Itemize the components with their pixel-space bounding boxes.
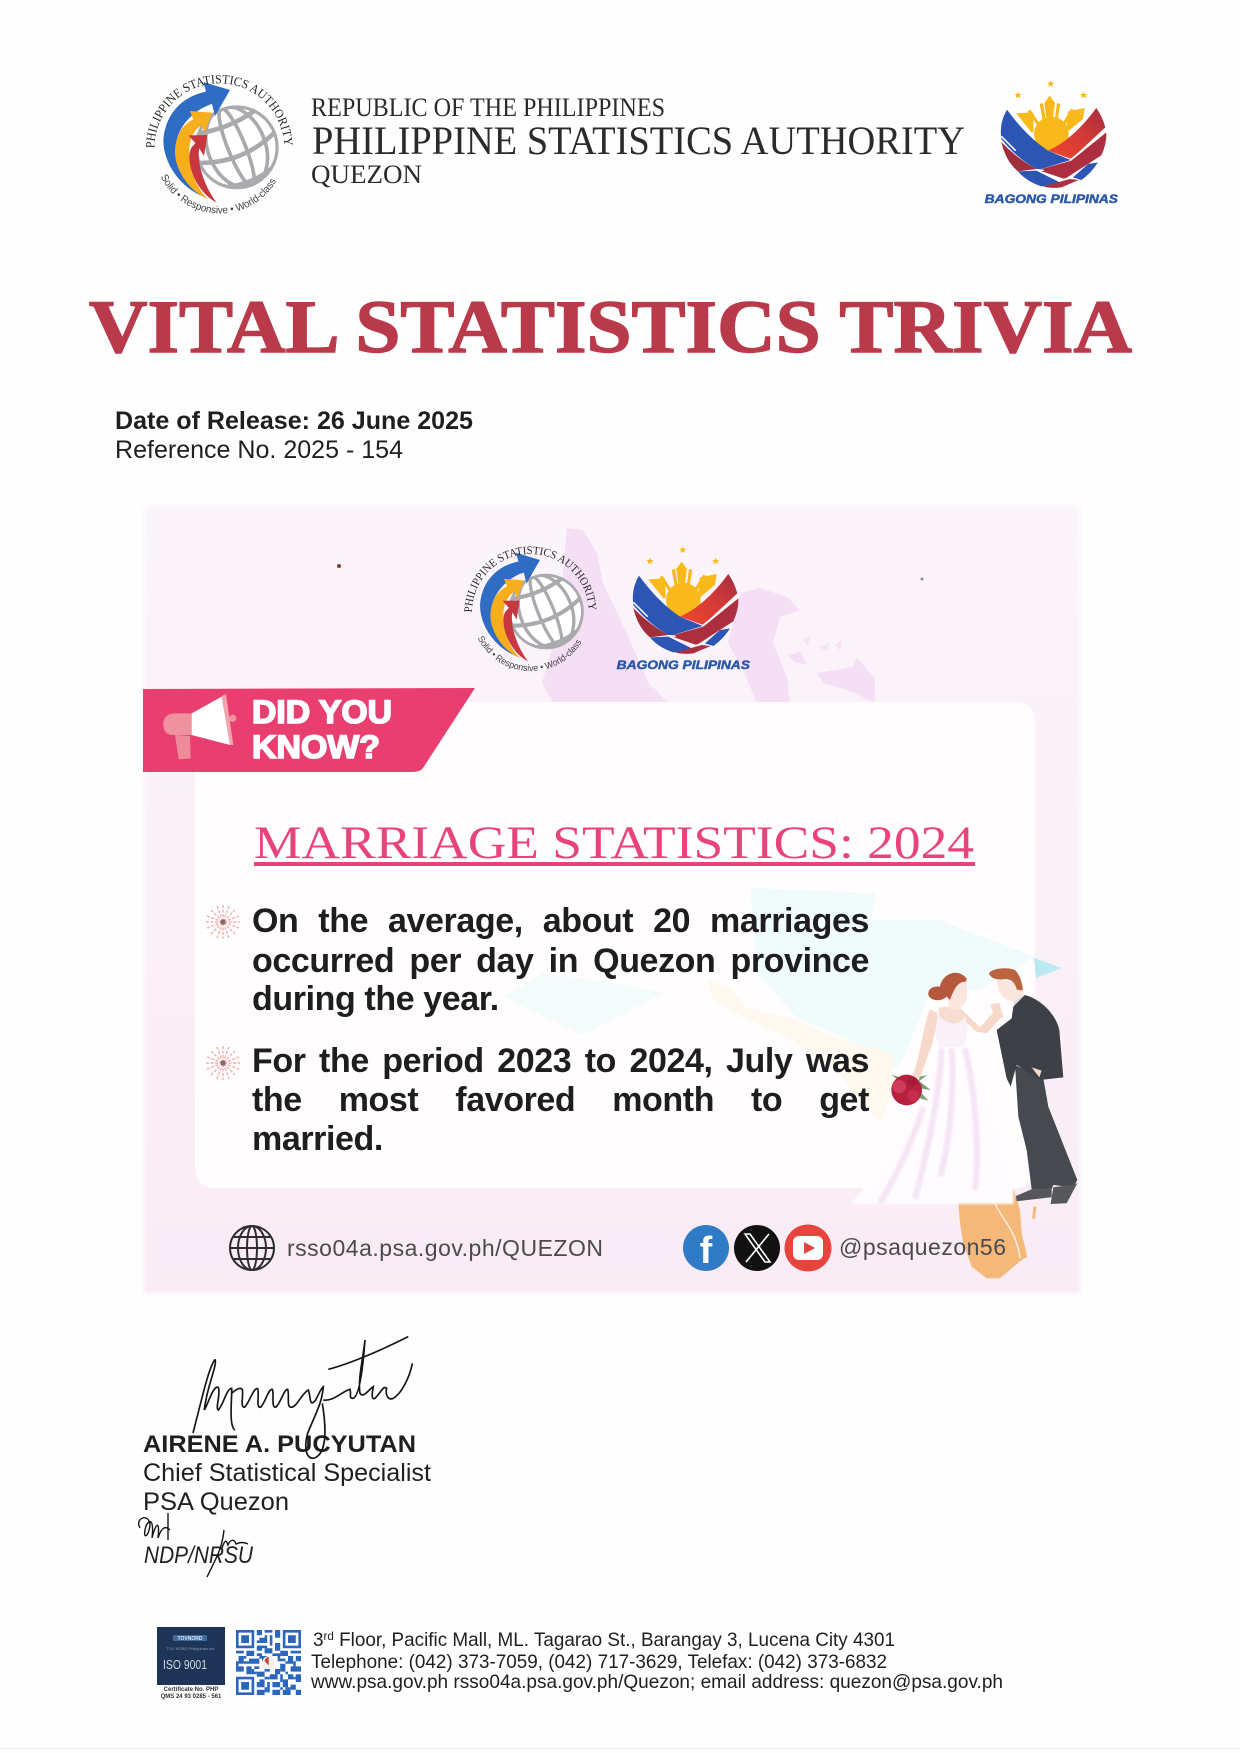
text: website: rsso04a.psa.gov.ph/QUEZON	[287, 1235, 603, 1261]
icon: sparkle bullet 2	[206, 1046, 240, 1080]
text: agency header: REPUBLIC OF THE PHILIPPINES	[311, 93, 665, 122]
map: cyan point	[1034, 958, 1062, 978]
icon: Bagong Pilipinas logo small	[617, 546, 751, 672]
text: release details	[115, 407, 473, 464]
icon: Bagong Pilipinas logo small: BAGONG PILIPINAS	[617, 658, 751, 672]
icon: PSA seal logo small: PHILIPPINE STATISTICS AUTHORITY	[464, 546, 596, 612]
title: VITAL STATISTICS TRIVIA	[89, 286, 1132, 369]
text: contact footer: Floor, Pacific Mall, ML. Tagarao St., Barangay 3, Lucena City 4301	[334, 1629, 895, 1651]
text: signatory: AIRENE A. PUCYUTAN	[143, 1431, 416, 1458]
icon: ISO certification badge: TOVNORD	[178, 1636, 203, 1642]
text: contact footer: Telephone: (042) 373-7059, (042) 717-3629, Telefax: (042) 373-6832	[311, 1651, 887, 1673]
icon: megaphone	[163, 694, 236, 759]
initials 1	[139, 1513, 170, 1540]
icon: PSA seal logo: Solid • Responsive • World-class	[162, 174, 276, 214]
bride arms and head	[912, 973, 1003, 1079]
heading: marriage statistics: MARRIAGE STATISTICS: 2024	[254, 817, 974, 869]
icon: facebook	[683, 1225, 729, 1272]
text: signatory: Chief Statistical Specialist	[143, 1459, 431, 1487]
signature scribble	[193, 1337, 412, 1458]
illustration: bride and groom	[850, 968, 1077, 1204]
map: orange island	[958, 1188, 1037, 1278]
signature block	[139, 1337, 431, 1577]
text: agency header: PHILIPPINE STATISTICS AUTHORITY	[312, 118, 965, 163]
groom	[989, 968, 1077, 1204]
map: faint cyan island	[504, 888, 1036, 1067]
text: contact footer	[310, 1629, 1003, 1693]
icon: ISO certification badge: QMS 24 93 0285 - 561	[161, 1694, 222, 1700]
text: contact footer: rd	[324, 1629, 334, 1643]
icon: ISO certification badge: Certificate No. PHP	[164, 1687, 218, 1693]
panel background	[144, 506, 1080, 1293]
text: contact footer: www.psa.gov.ph rsso04a.psa.gov.ph/Quezon; email address: quezon@psa.gov.ph	[310, 1671, 1003, 1693]
text: release details: Date of Release: 26 June 2025	[115, 407, 473, 435]
banner: did you know	[143, 688, 475, 772]
panel: did you know poster	[143, 508, 1080, 1294]
white content card	[195, 702, 1035, 1188]
bride dress	[850, 1007, 1014, 1204]
icon: PSA seal logo	[146, 75, 293, 214]
text: did you know	[252, 694, 392, 765]
icon: PSA seal logo small	[464, 546, 596, 672]
bouquet	[891, 1075, 931, 1105]
text: For the period 2023 to 2024, July was	[252, 1042, 869, 1080]
icon: ISO certification badge: ISO 9001	[163, 1658, 207, 1672]
icon: QR code	[236, 1630, 301, 1695]
stray dots	[337, 564, 924, 580]
text: married.	[252, 1120, 383, 1158]
text: during the year.	[252, 980, 499, 1018]
icon: ISO certification badge	[157, 1627, 225, 1700]
text: agency header	[311, 93, 965, 189]
text: signatory: NDP/NRSU	[144, 1542, 254, 1569]
icon: PSA seal logo: PHILIPPINE STATISTICS AUTHORITY	[146, 75, 293, 148]
text: signatory: PSA Quezon	[143, 1488, 289, 1516]
text: the most favored month to get	[252, 1081, 869, 1119]
text: On the average, about 20 marriages	[252, 902, 869, 940]
text: bullet two	[252, 1042, 870, 1158]
map: faint peach island	[707, 980, 893, 1123]
icon: Bagong Pilipinas logo	[985, 80, 1119, 206]
text: social handle: @psaquezon56	[839, 1234, 1006, 1260]
icon: Bagong Pilipinas logo: BAGONG PILIPINAS	[985, 192, 1119, 206]
text: release details: Reference No. 2025 - 154	[115, 436, 403, 464]
text: occurred per day in Quezon province	[252, 942, 869, 980]
icon: X	[734, 1225, 780, 1271]
icon: facebook: f	[700, 1230, 713, 1272]
text: did you know: KNOW?	[252, 729, 380, 765]
initials 2	[207, 1530, 248, 1577]
icon: youtube	[784, 1224, 832, 1272]
text: contact footer: 3	[313, 1629, 324, 1651]
text: did you know: DID YOU	[252, 694, 392, 730]
text: signatory	[143, 1431, 431, 1569]
icon: globe	[230, 1226, 274, 1270]
icon: PSA seal logo small: Solid • Responsive • World-class	[478, 636, 581, 672]
icon: ISO certification badge: TÜV NORD Philippines Inc.	[167, 1646, 215, 1651]
text: agency header: QUEZON	[311, 160, 422, 189]
map: faint pink islands	[542, 528, 876, 870]
icon: sparkle bullet 1	[206, 905, 240, 939]
text: bullet one	[252, 902, 869, 1018]
